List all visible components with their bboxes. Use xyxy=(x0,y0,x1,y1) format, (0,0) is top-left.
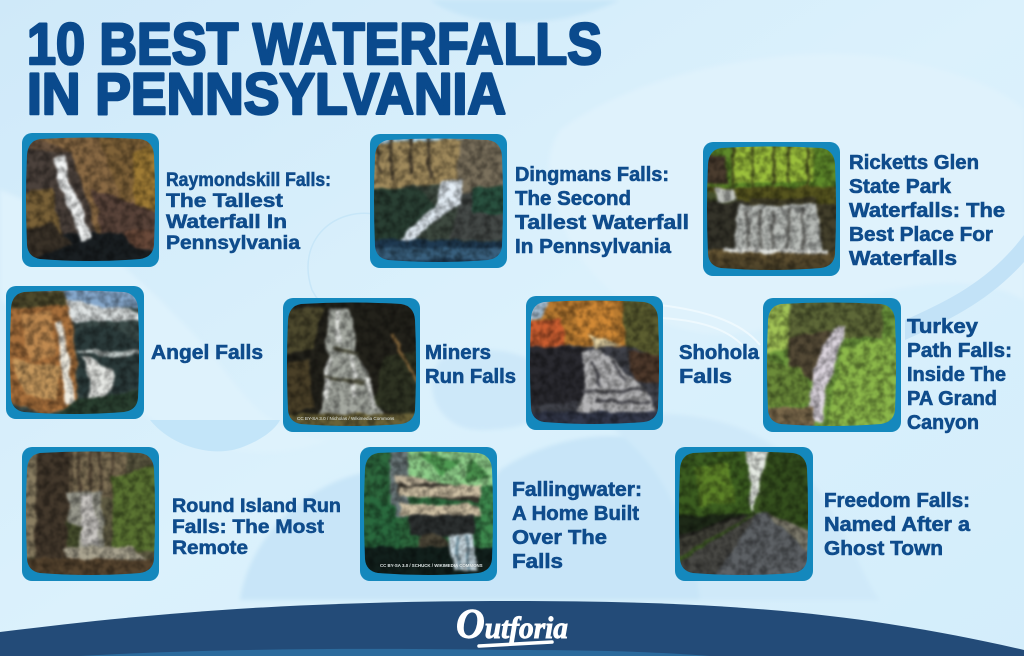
logo: Outforia: Outforia xyxy=(456,602,568,648)
title: IN PENNSYLVANIA xyxy=(27,62,506,127)
label: Freedom Falls xyxy=(824,489,971,560)
label: Raymondskill Falls: Raymondskill Falls: xyxy=(166,169,331,191)
panel: Turkey Path Falls xyxy=(763,298,1010,434)
label: Ricketts Glen: State Park xyxy=(849,175,952,198)
photo credit: CC BY-SA 3.0 / SCHUCK / WIKIMEDIA COMMONS xyxy=(380,563,483,568)
label: Raymondskill Falls xyxy=(166,169,331,254)
photo: Shohola Falls xyxy=(526,296,663,430)
label: Ricketts Glen: Ricketts Glen xyxy=(849,151,979,174)
photo: Raymondskill Falls xyxy=(22,133,159,267)
panel: Angel Falls xyxy=(6,286,262,419)
label: Fallingwater: Falls xyxy=(512,550,563,573)
label: Freedom Falls: Named After a xyxy=(824,513,971,536)
label: Fallingwater xyxy=(512,478,642,573)
label: Dingmans Falls xyxy=(515,163,689,258)
photo: Miners Run Falls xyxy=(283,298,420,432)
label: Fallingwater: Fallingwater: xyxy=(512,478,642,501)
title xyxy=(27,12,602,127)
label: Ricketts Glen xyxy=(849,151,1005,270)
label: Dingmans Falls: Tallest Waterfall xyxy=(515,211,689,234)
label: Shohola Falls: Shohola xyxy=(679,341,760,364)
label: Miners Run Falls xyxy=(425,341,516,388)
panel: Fallingwater xyxy=(360,447,640,581)
label: Miners Run Falls: Miners xyxy=(425,341,491,364)
label: Ricketts Glen: Waterfalls: The xyxy=(849,199,1005,222)
label: Freedom Falls: Freedom Falls: xyxy=(824,489,970,512)
label: Turkey Path Falls: PA Grand xyxy=(907,387,997,410)
footer band xyxy=(0,601,1024,656)
label: Ricketts Glen: Waterfalls xyxy=(849,247,957,270)
label: Fallingwater: A Home Built xyxy=(512,502,639,525)
label: Dingmans Falls: The Second xyxy=(515,187,631,210)
label: Dingmans Falls: In Pennsylvania xyxy=(515,235,672,258)
label: Angel Falls: Angel Falls xyxy=(151,341,263,364)
panel: Round Island Run Falls xyxy=(22,447,340,581)
label: Turkey Path Falls: Inside The xyxy=(907,363,1006,386)
photo: Fallingwater xyxy=(360,447,497,581)
panel: Shohola Falls xyxy=(526,296,760,430)
photo: Freedom Falls xyxy=(675,447,813,581)
label: Shohola Falls xyxy=(679,341,760,388)
label: Turkey Path Falls: Turkey xyxy=(907,315,979,338)
label: Shohola Falls: Falls xyxy=(679,365,732,388)
label: Fallingwater: Over The xyxy=(512,526,607,549)
label: Raymondskill Falls: Waterfall In xyxy=(166,211,287,233)
photo: Ricketts Glen xyxy=(703,142,840,276)
label: Miners Run Falls: Run Falls xyxy=(425,365,516,388)
label: Round Island Run Falls: Remote xyxy=(172,537,248,559)
photo: Turkey Path Falls xyxy=(763,298,901,432)
label: Round Island Run Falls xyxy=(172,495,341,559)
label: Raymondskill Falls: The Tallest xyxy=(166,190,284,212)
title: 10 BEST WATERFALLS xyxy=(27,12,602,77)
photo: Angel Falls xyxy=(6,286,144,419)
label: Ricketts Glen: Best Place For xyxy=(849,223,993,246)
panel: Raymondskill Falls xyxy=(22,133,330,267)
panel: Freedom Falls xyxy=(675,447,970,581)
label: Turkey Path Falls xyxy=(907,315,1012,434)
label: Turkey Path Falls: Canyon xyxy=(907,411,979,434)
photo credit: CC BY-SA 3.0 / Nicholas / Wikimedia Commons xyxy=(297,416,395,421)
label: Round Island Run Falls: Round Island Run xyxy=(172,495,341,517)
label: Round Island Run Falls: Falls: The Most xyxy=(172,516,325,538)
photo: Dingmans Falls xyxy=(370,134,507,268)
panel: Dingmans Falls xyxy=(370,134,688,268)
panel: Ricketts Glen xyxy=(703,142,1005,276)
label: Dingmans Falls: Dingmans Falls: xyxy=(515,163,669,186)
panel: Miners Run Falls xyxy=(283,298,516,432)
photo: Round Island Run Falls xyxy=(22,447,159,581)
label: Raymondskill Falls: Pennsylvania xyxy=(166,232,300,254)
label: Turkey Path Falls: Path Falls: xyxy=(907,339,1012,362)
label: Freedom Falls: Ghost Town xyxy=(824,537,943,560)
